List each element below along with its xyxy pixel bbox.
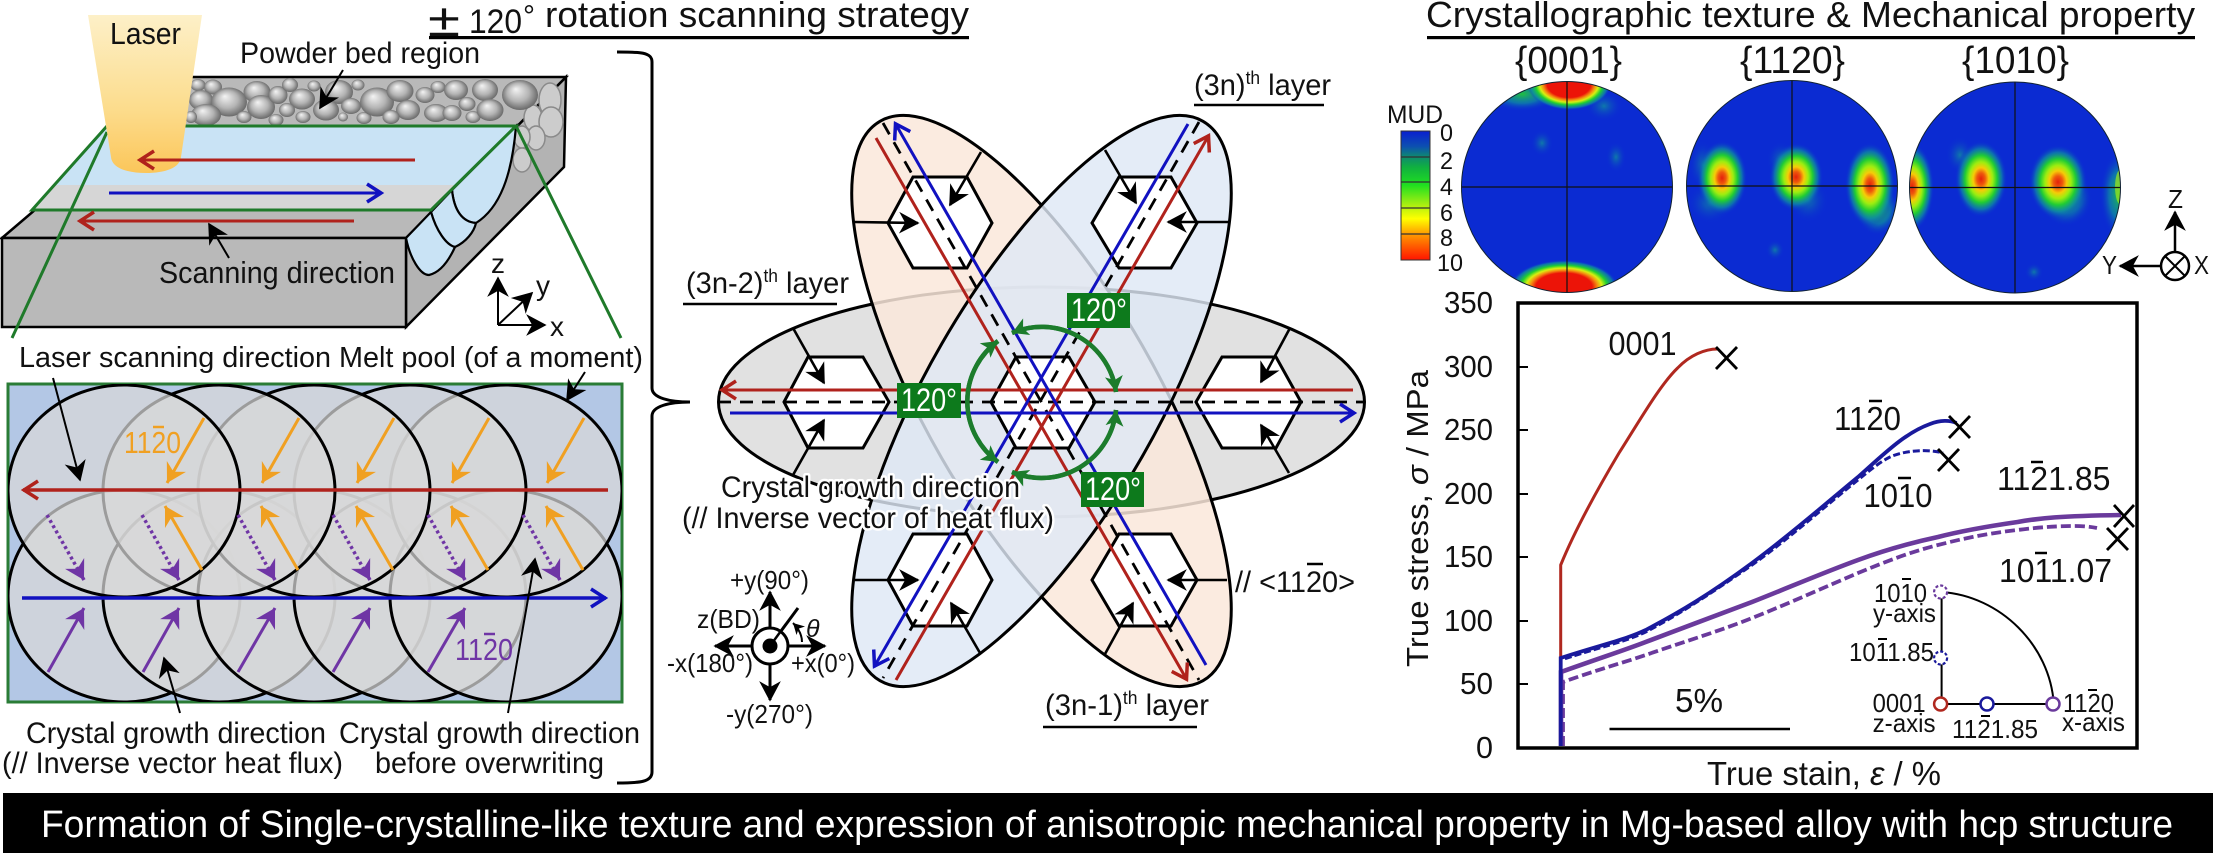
MUD colour scale legend: 10 — [1437, 250, 1463, 277]
pointer: laser scanning direction — [53, 378, 80, 480]
120 degree badge: upper: 120° — [1071, 292, 1127, 328]
label: 11-21.85: 1121.85 — [1997, 460, 2110, 497]
coordinate legend: -x(180°) — [667, 648, 753, 678]
melt pool background — [8, 384, 622, 702]
blue scan lines — [730, 123, 1355, 667]
block top face — [2, 77, 566, 238]
y tick labels: 300 — [1444, 349, 1493, 384]
120 degree badge: lower: 120° — [1085, 471, 1141, 507]
lower row of melt pools — [8, 490, 622, 702]
label: crystal growth direction in diagram: (// Inverse vector of heat flux) — [682, 502, 1054, 535]
xyz axes: y — [536, 270, 550, 301]
label: crystal growth direction — [2, 717, 343, 780]
inset: inverse pole figure triangle: 0001 — [1873, 688, 1926, 718]
specimen axes icon: X — [2194, 250, 2209, 280]
specimen axes icon — [2102, 184, 2209, 280]
melt pool scallops on side face — [406, 126, 516, 275]
label: 3n layer: th — [1246, 68, 1260, 88]
scale bar: 5%: 5% — [1675, 682, 1723, 719]
label: 3n-1 layer — [1043, 688, 1209, 727]
y axis title: True stress, σ / MPa — [1400, 369, 1435, 667]
MUD colour scale legend — [1387, 101, 1463, 277]
label: 10-10: 1010 — [1864, 477, 1932, 514]
xyz axes: x — [550, 311, 564, 342]
y tick labels: 50 — [1460, 666, 1493, 701]
fracture markers — [1716, 347, 2134, 550]
hexagon: bottom left — [888, 534, 992, 626]
y tick labels — [1444, 285, 1493, 765]
specimen axes icon: Y — [2102, 250, 2117, 280]
hexagon: left — [784, 357, 889, 448]
pole figure: 1120 — [1686, 40, 1900, 292]
layer ellipse: 3n — [780, 64, 1303, 738]
curve: 0001 — [1561, 349, 1717, 746]
scanning direction pointer — [209, 224, 229, 258]
powder bed spheres — [185, 78, 538, 126]
panel: rotation scanning diagram — [667, 64, 1364, 738]
label: 3n-2 layer: th — [763, 266, 778, 286]
powder bed label: Powder bed region — [240, 37, 480, 70]
label: 11-20: 1120 — [1834, 400, 1901, 437]
inset: inverse pole figure triangle: x-axis — [2062, 707, 2125, 737]
coordinate legend: θ — [806, 615, 820, 643]
pole figure: 0001 — [1462, 40, 1672, 314]
side powder grains — [513, 83, 563, 172]
orange miller index: 1120 — [124, 425, 181, 460]
inset: inverse pole figure triangle: 1010 — [1874, 578, 1927, 608]
solid purple arrows — [48, 608, 465, 672]
powder bed pointer — [320, 70, 343, 108]
inset: inverse pole figure triangle: z-axis — [1873, 708, 1936, 738]
coordinate legend: z(BD) — [697, 604, 760, 634]
label: 3n-2 layer — [683, 266, 849, 304]
inset: inverse pole figure triangle — [1849, 578, 2125, 744]
coordinate legend: +y(90°) — [730, 565, 809, 595]
coordinate legend: -y(270°) — [726, 699, 813, 729]
block front face — [2, 238, 406, 327]
bracket — [617, 52, 690, 783]
coordinate legend: +x(0°) — [791, 648, 855, 678]
pole figure: 1010 — [1909, 46, 2121, 294]
pole figure: 1010: {1010} — [1962, 40, 2069, 82]
label: crystal growth direction in diagram — [682, 471, 1054, 535]
upper orange growth arrows — [167, 418, 584, 483]
scan arrow: red top — [139, 158, 415, 162]
label: 3n-2 layer: (3n-2) — [686, 267, 766, 300]
blue scan line — [22, 596, 606, 600]
title: rotation scanning strategy — [428, 0, 969, 46]
y tick labels: 0 — [1476, 730, 1493, 765]
MUD colour scale legend: 0 — [1440, 120, 1453, 147]
red scan lines — [721, 135, 1353, 680]
plot frame — [1518, 303, 2137, 748]
label: 3n layer: layer — [1260, 69, 1331, 102]
dashed center lines — [718, 122, 1364, 680]
y tick labels: 200 — [1444, 476, 1493, 511]
label: 3n layer — [1194, 68, 1331, 105]
label: 3n-1 layer: (3n-1) — [1045, 689, 1125, 722]
scan arrow: blue — [109, 192, 382, 194]
label: growth before overwriting — [339, 717, 640, 780]
label: 3n-1 layer: th — [1123, 688, 1138, 708]
MUD colour scale legend: 2 — [1440, 148, 1453, 175]
laser beam — [88, 15, 202, 173]
bottom banner: Formation of Single-crystalline-like texture and expression of anisotropic mechanical property in Mg-based alloy with hcp structure — [41, 804, 2173, 846]
hexagon: bottom right — [1092, 534, 1197, 626]
label: crystal growth direction in diagram: Crystal growth direction — [721, 471, 1020, 504]
red scan line — [23, 488, 608, 492]
coordinate legend — [667, 565, 855, 729]
layer ellipse: 3n-1 — [780, 64, 1303, 738]
hexagon growth arrows — [793, 150, 1290, 654]
block side face — [406, 77, 566, 327]
y ticks — [1518, 367, 1528, 684]
curve: purple solid 11-21.85 — [1561, 515, 2121, 746]
curve: blue dashed 10-10 — [1561, 451, 1943, 746]
y tick labels: 350 — [1444, 285, 1493, 320]
scanning direction label: Scanning direction — [159, 255, 395, 290]
hexagon: right — [1196, 357, 1301, 448]
y tick labels: 150 — [1444, 539, 1493, 574]
x axis title: True stain, ε / % — [1707, 755, 1941, 792]
label: crystal growth direction: Crystal growth direction — [26, 717, 326, 750]
hexagon: top left — [888, 177, 992, 268]
specimen axes icon: Z — [2168, 184, 2183, 214]
y tick labels: 100 — [1444, 603, 1493, 638]
MUD colour scale legend: 8 — [1440, 225, 1453, 252]
panel: laser powder bed block — [2, 15, 621, 342]
label: 10-11.07: 1011.07 — [1999, 552, 2112, 589]
melted region — [32, 126, 516, 210]
label: laser scanning direction and melt pool: Laser scanning direction Melt pool (of a moment) — [19, 342, 643, 374]
scan arrow: red bottom — [79, 220, 354, 222]
label: 0001: 0001 — [1608, 325, 1676, 362]
laser label: Laser — [110, 16, 181, 51]
upper row of melt pools — [8, 385, 622, 597]
label: crystal growth direction: (// Inverse vector heat flux) — [2, 747, 343, 780]
green section outline — [12, 126, 621, 338]
MUD colour scale legend: 4 — [1440, 174, 1453, 201]
pole figure: 0001: {0001} — [1515, 40, 1622, 82]
inset: inverse pole figure triangle: y-axis — [1873, 598, 1936, 628]
label: 3n layer: (3n) — [1194, 69, 1247, 102]
xyz axes — [491, 248, 564, 342]
title: rotation scanning strategy: 120 — [469, 3, 522, 41]
purple miller index: 1120 — [455, 632, 513, 667]
dotted purple arrows — [47, 515, 560, 580]
label: 3n-2 layer: layer — [778, 267, 849, 300]
label: 3n-1 layer: layer — [1138, 689, 1209, 722]
inset: inverse pole figure triangle: 1121.85 — [1952, 714, 2038, 744]
label: parallel to 11-20: // <1120> — [1235, 566, 1355, 599]
curve: purple dashed 10-11.07 — [1563, 526, 2097, 746]
green rotation arcs — [967, 327, 1116, 478]
label: growth before overwriting: before overwriting — [375, 747, 604, 780]
label: growth before overwriting: Crystal growth direction — [339, 717, 640, 750]
curve: blue solid 11-20 — [1561, 421, 1956, 746]
pointer: growth before overwriting — [508, 559, 535, 713]
inset: inverse pole figure triangle: 1120 — [2063, 688, 2114, 718]
y tick labels: 250 — [1444, 412, 1493, 447]
pointer: crystal growth direction — [164, 658, 180, 713]
pole figure: 1120: {1120} — [1740, 40, 1845, 82]
pre-solidified strip — [32, 185, 456, 210]
inset: inverse pole figure triangle: 1011.85 — [1849, 637, 1934, 667]
MUD colour scale legend: 6 — [1440, 200, 1453, 227]
panel: melt pool top view — [8, 384, 622, 702]
pointer: melt pool — [567, 372, 585, 400]
hexagon: center — [991, 357, 1095, 448]
layer ellipse: 3n-2 — [718, 287, 1364, 517]
bottom banner — [3, 793, 2213, 853]
xyz axes: z — [491, 248, 505, 279]
title: rotation scanning strategy: ° — [523, 0, 535, 33]
120 degree badge: left: 120° — [901, 382, 957, 418]
stress-strain chart — [1400, 285, 2137, 792]
MUD colour scale legend: MUD — [1387, 101, 1443, 129]
hexagon: top right — [1092, 177, 1197, 268]
lower orange growth arrows — [165, 506, 583, 570]
